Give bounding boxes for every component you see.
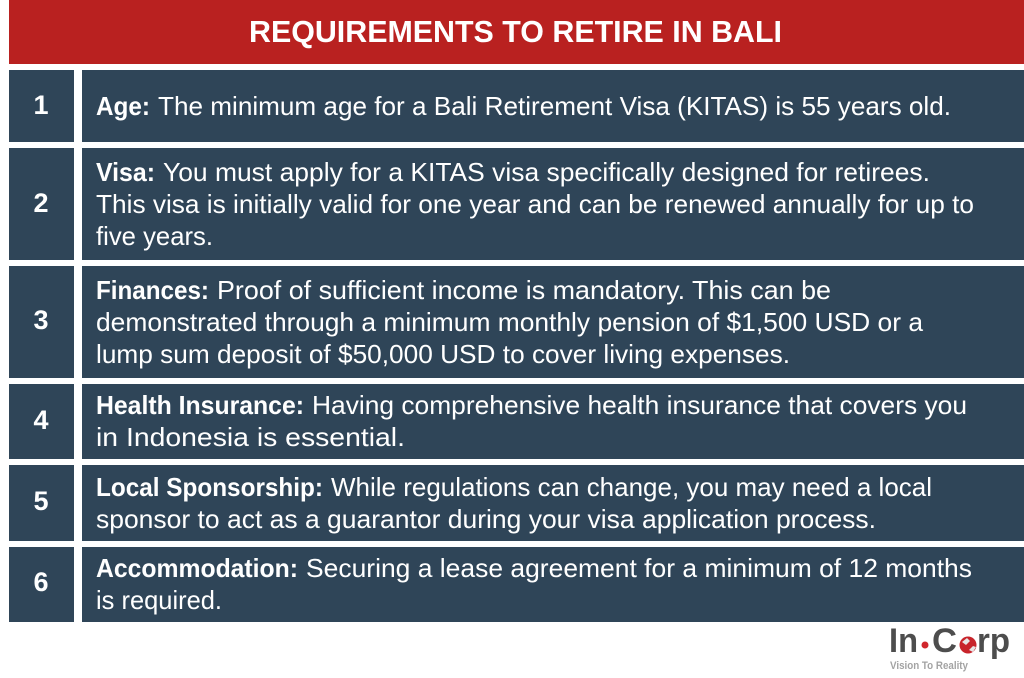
- row 3: finances: Finances:: [96, 275, 209, 305]
- row 2: visa: 2: [33, 188, 49, 218]
- row 5: local sponsorship: sponsor to act as a guarantor during your visa application process.: [96, 504, 876, 534]
- title banner: REQUIREMENTS TO RETIRE IN BALI: [249, 14, 782, 49]
- row 3: finances: 3: [33, 305, 49, 335]
- logo: InCorp: C: [932, 622, 957, 660]
- logo: InCorp: Vision To Reality: [890, 660, 969, 672]
- title banner: [9, 0, 1024, 64]
- row 4: health insurance: [9, 384, 1024, 459]
- row 4: health insurance: in Indonesia is essential.: [96, 422, 405, 452]
- row 6: accommodation: Securing a lease agreement for a minimum of 12 months: [306, 553, 972, 583]
- row 6: accommodation: 6: [33, 567, 49, 597]
- row 3: finances: demonstrated through a minimum monthly pension of $1,500 USD or a: [96, 307, 924, 337]
- row 6: accommodation: [9, 547, 1024, 622]
- row 3: finances: [9, 266, 1024, 378]
- row 4: health insurance: Having comprehensive health insurance that covers you: [312, 390, 967, 420]
- row 2: visa: [9, 148, 1024, 260]
- row 1: age: [9, 70, 1024, 142]
- row 1: age: 1: [33, 90, 49, 120]
- row 2: visa: Visa:: [96, 157, 155, 187]
- row 6: accommodation: is required.: [96, 585, 222, 615]
- row 5: local sponsorship: Local Sponsorship:: [96, 472, 323, 502]
- row 5: local sponsorship: While regulations can change, you may need a local: [331, 472, 932, 502]
- row 4: health insurance: 4: [33, 405, 49, 435]
- row 5: local sponsorship: 5: [33, 486, 49, 516]
- row 1: age: Age:: [96, 91, 150, 121]
- row 1: age: The minimum age for a Bali Retirement Visa (KITAS) is 55 years old.: [158, 91, 951, 121]
- row 3: finances: Proof of sufficient income is mandatory. This can be: [217, 275, 831, 305]
- logo: InCorp: [889, 622, 1010, 672]
- row 2: visa: five years.: [96, 221, 213, 251]
- logo: InCorp: rp: [977, 622, 1010, 660]
- row 5: local sponsorship: [9, 465, 1024, 541]
- row 4: health insurance: Health Insurance:: [96, 390, 304, 420]
- row 3: finances: lump sum deposit of $50,000 USD to cover living expenses.: [96, 339, 790, 369]
- row 2: visa: You must apply for a KITAS visa specifically designed for retirees.: [163, 157, 930, 187]
- logo: InCorp: In: [889, 622, 918, 660]
- row 2: visa: This visa is initially valid for one year and can be renewed annually for up to: [96, 189, 974, 219]
- row 6: accommodation: Accommodation:: [96, 553, 298, 583]
